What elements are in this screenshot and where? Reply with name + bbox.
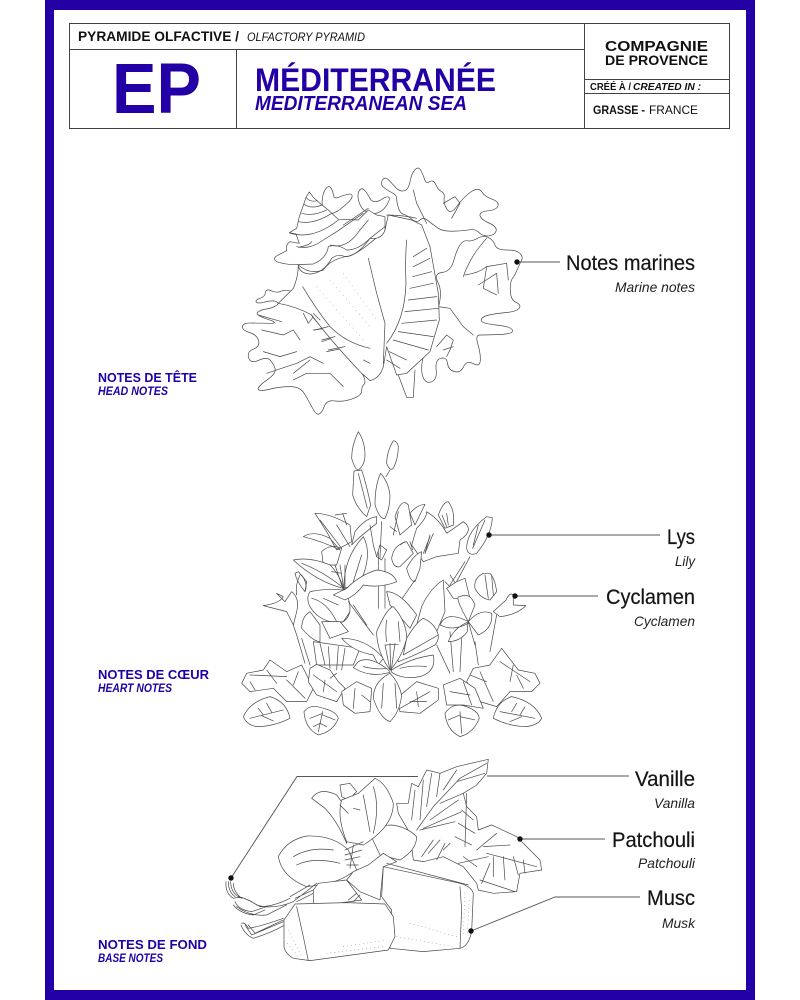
callout: vanilla: Vanilla — [654, 795, 695, 811]
illustration: conch shell and coral — [242, 168, 522, 414]
logo letters EP: EP — [112, 50, 201, 129]
brand name: COMPAGNIE — [605, 39, 708, 55]
callout: marine notes: Marine notes — [615, 279, 695, 295]
perfume name: MÉDITERRANÉE — [255, 62, 496, 98]
callout: patchouli — [517, 829, 696, 871]
coral right lobes — [422, 236, 522, 382]
right cyclamen cluster — [437, 573, 526, 673]
central lily bloom — [342, 607, 438, 722]
left label: base notes: BASE NOTES — [98, 953, 163, 965]
left label: base notes: NOTES DE FOND — [98, 937, 207, 952]
lily buds — [352, 432, 398, 517]
callout: patchouli: Patchouli — [612, 829, 695, 852]
musk soap blocks — [284, 863, 473, 961]
callout: marine notes — [514, 252, 695, 295]
vanilla flower — [278, 778, 417, 900]
callout: patchouli: Patchouli — [638, 855, 696, 871]
left label: heart notes: NOTES DE CŒUR — [98, 667, 210, 682]
callout: lily: Lily — [675, 553, 696, 569]
back flowers and leaves — [303, 473, 492, 608]
perfume name: MEDITERRANEAN SEA — [255, 93, 467, 115]
coral lower left — [242, 290, 365, 414]
callout: marine notes: Notes marines — [566, 252, 695, 275]
coral top left and top right — [322, 168, 498, 236]
callout: musk: Musc — [647, 887, 695, 910]
brand name — [605, 39, 708, 68]
header title: olfactory pyramid — [78, 29, 365, 44]
conch outer lip ribs — [387, 215, 438, 397]
shell speckle — [317, 273, 377, 340]
origin: FRANCE — [649, 103, 698, 117]
left label: head notes: NOTES DE TÊTE — [98, 370, 197, 385]
vanilla pods — [226, 880, 362, 938]
callout: musk: Musk — [662, 915, 696, 931]
bottom leaves — [242, 648, 542, 737]
origin: GRASSE - — [593, 103, 645, 117]
callout: musk — [468, 887, 696, 934]
left label: base notes — [98, 937, 207, 965]
callout: cyclamen — [512, 586, 695, 629]
left cyclamen — [263, 575, 360, 670]
conch spire — [275, 192, 385, 265]
right petal cluster — [417, 578, 470, 632]
left label: head notes — [98, 370, 197, 398]
created in — [590, 80, 701, 93]
header table — [70, 23, 730, 129]
callout: lily: Lys — [667, 526, 695, 549]
created in: CREATED IN : — [633, 81, 701, 93]
left label: heart notes: HEART NOTES — [98, 683, 172, 695]
created in: CRÉÉ À / — [590, 80, 631, 93]
perfume name — [255, 62, 496, 115]
header title: olfactory pyramid: PYRAMIDE OLFACTIVE / — [78, 29, 239, 44]
conch body — [278, 215, 439, 381]
origin — [593, 103, 698, 117]
callout: cyclamen: Cyclamen — [634, 613, 695, 629]
left lily bloom — [293, 537, 397, 635]
illustration: lilies and cyclamen — [242, 432, 542, 737]
callout: vanilla — [228, 768, 695, 881]
patchouli and vanilla leaves — [397, 759, 542, 893]
brand name: DE PROVENCE — [605, 52, 708, 68]
illustration: vanilla, patchouli and musk — [226, 759, 542, 961]
left label: head notes: HEAD NOTES — [98, 386, 168, 398]
callout: vanilla: Vanille — [635, 768, 695, 791]
header title: olfactory pyramid: OLFACTORY PYRAMID — [247, 30, 365, 44]
left label: heart notes — [98, 667, 210, 695]
callout: lily — [486, 526, 696, 569]
callout: cyclamen: Cyclamen — [606, 586, 695, 609]
